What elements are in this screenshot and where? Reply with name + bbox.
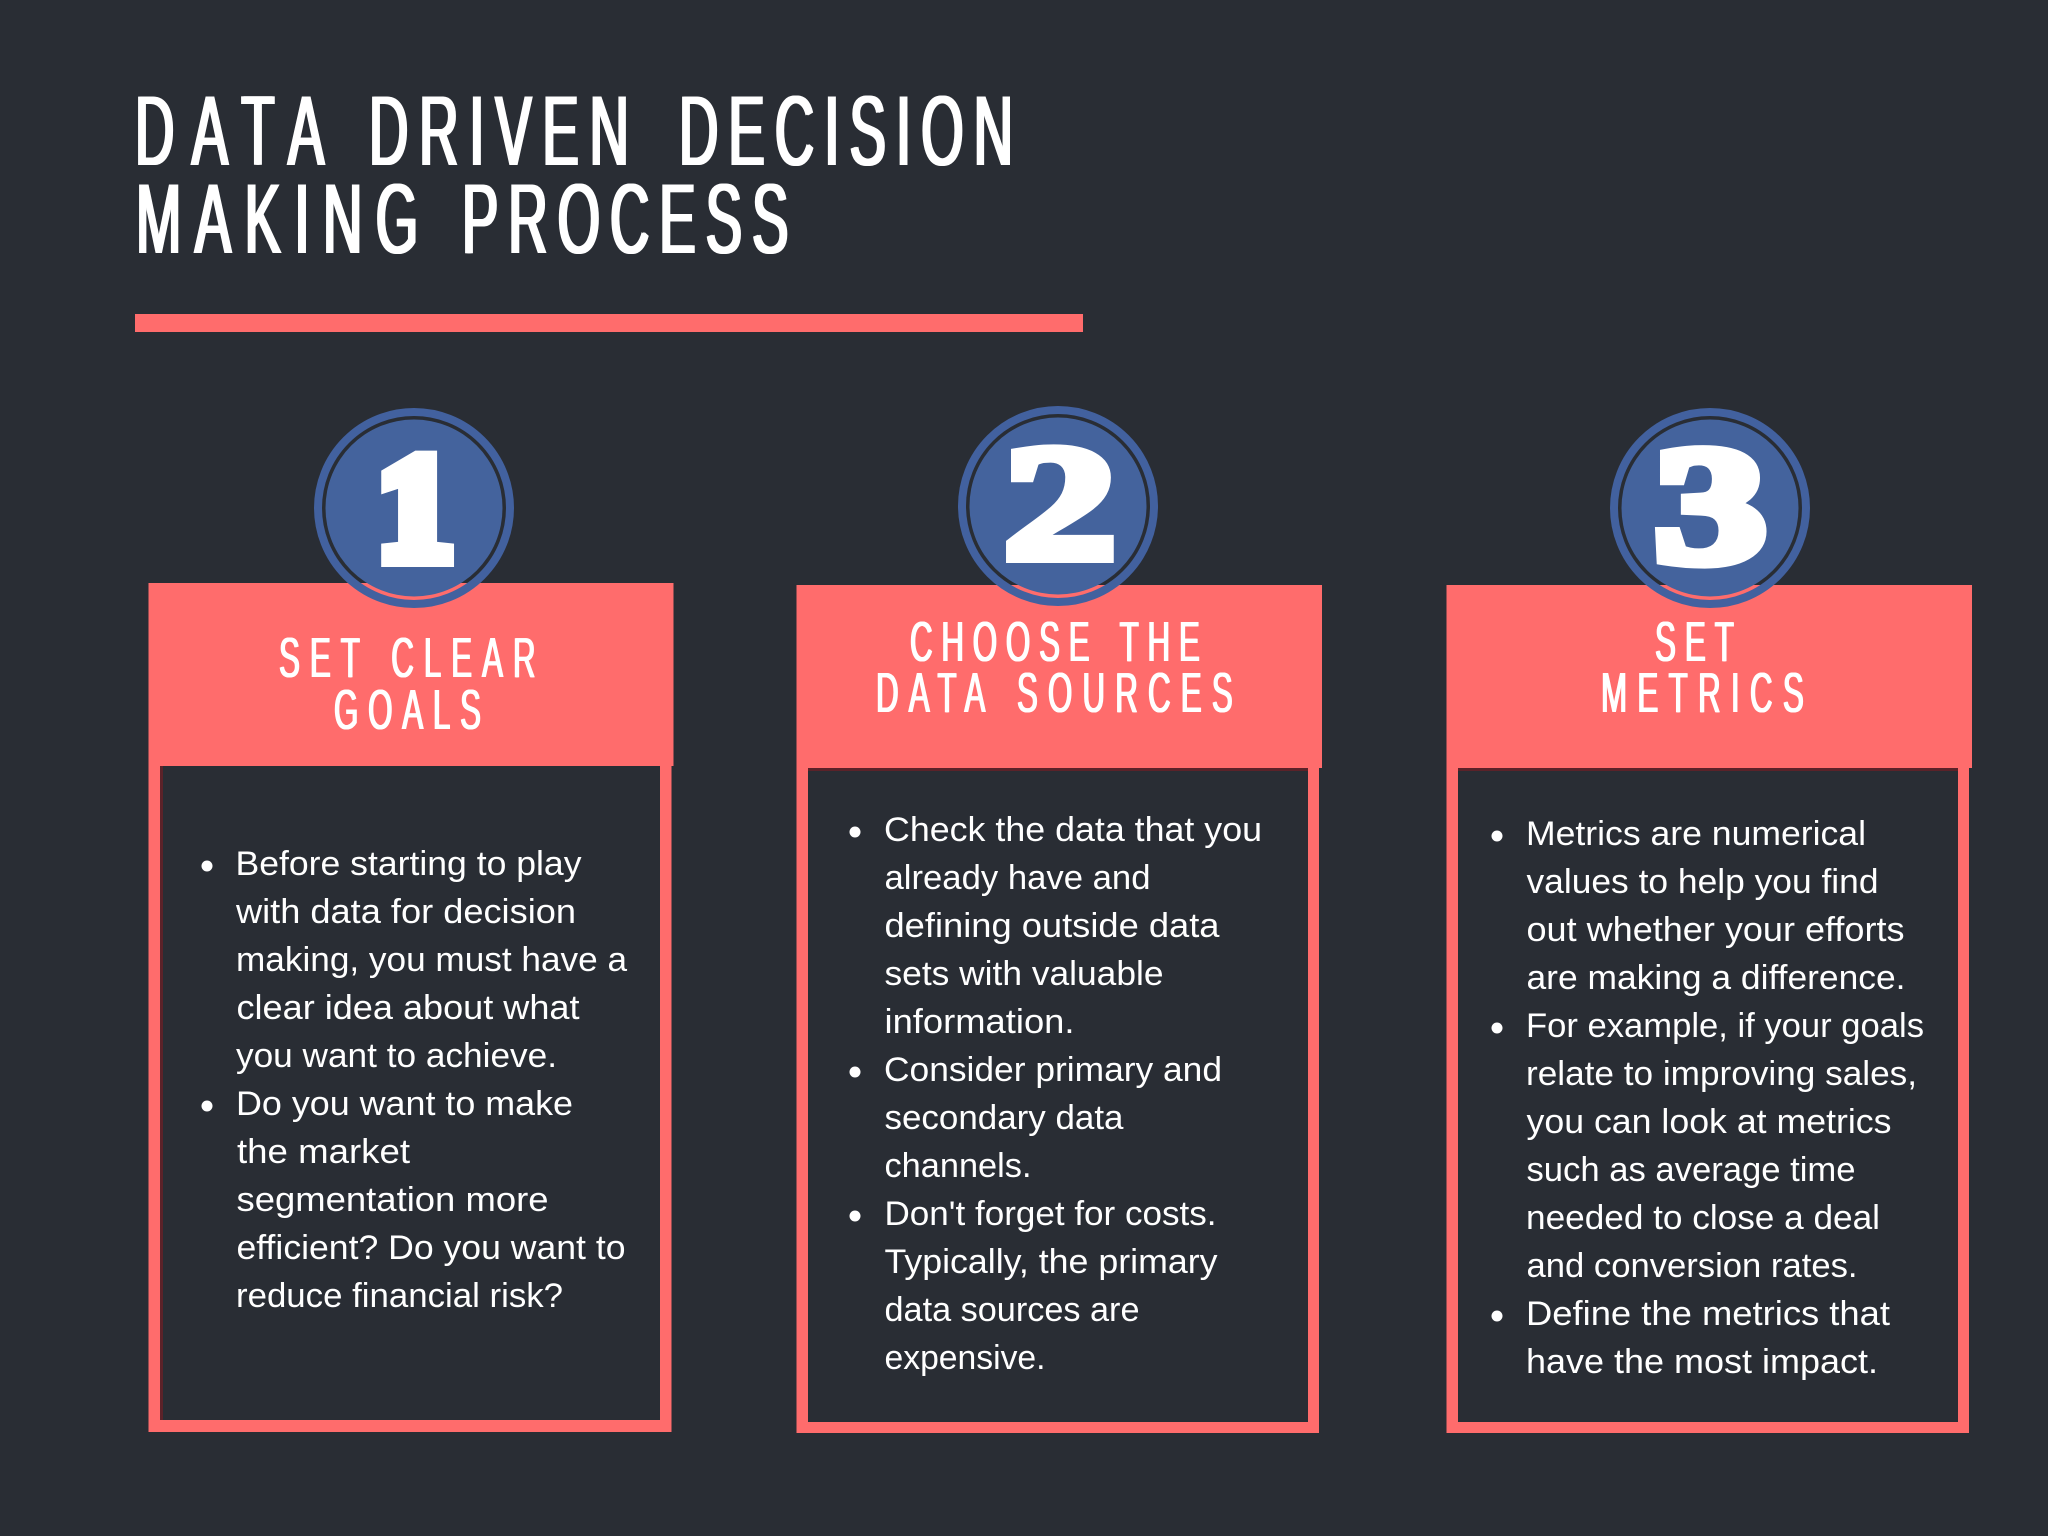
step 3 heading: METRICS: [1601, 661, 1814, 725]
step 1 bullet list: segmentation more: [236, 1181, 548, 1219]
step 1 bullet list: you want to achieve.: [236, 1037, 557, 1075]
step 1 bullet list: with data for decision: [235, 893, 576, 931]
step 3 bullet list: and conversion rates.: [1526, 1247, 1858, 1285]
step 2 bullet list: Consider primary and: [884, 1051, 1222, 1089]
step 1 bullet list: the market: [237, 1133, 411, 1171]
title: DRIVEN: [369, 75, 640, 186]
step 3 bullet list: such as average time: [1526, 1151, 1856, 1189]
title: [135, 75, 1023, 274]
step 1 bullet list: efficient? Do you want to: [236, 1229, 626, 1267]
title: MAKING: [136, 163, 432, 274]
icon: number 3 badge: [1614, 412, 1806, 604]
panel: step 2 choose the data sources: [796, 406, 1322, 1433]
step 3 heading: [1601, 610, 1814, 725]
step 2 body frame: [796, 762, 1319, 1433]
step 2 bullet list: [850, 811, 1262, 1377]
panel: step 1 set clear goals: [148, 408, 674, 1432]
panel: step 3 set metrics: [1446, 408, 1972, 1433]
step 2 bullet list: Typically, the primary: [884, 1243, 1218, 1281]
icon: number 1 badge: 1: [378, 426, 453, 591]
step 3 bullet list: For example, if your goals: [1526, 1007, 1924, 1045]
step 2 bullet list: data sources are: [884, 1291, 1140, 1329]
step 1 header band: [148, 583, 674, 766]
step 3 heading: SET: [1654, 610, 1742, 674]
step 2 bullet list: Don't forget for costs.: [884, 1195, 1216, 1233]
step 2 heading: CHOOSE THE: [910, 610, 1209, 674]
step 2 bullet list: defining outside data: [884, 907, 1220, 945]
step 1 bullet list: Do you want to make: [236, 1085, 573, 1123]
step 3 bullet list: relate to improving sales,: [1526, 1055, 1917, 1093]
step 1 heading: GOALS: [334, 678, 491, 742]
step 3 bullet list: are making a difference.: [1526, 959, 1906, 997]
step 1 heading: [279, 626, 546, 742]
title: DECISION: [679, 75, 1023, 186]
step 1 bullet list: making, you must have a: [236, 941, 627, 979]
step 2 bullet list: sets with valuable: [884, 955, 1164, 993]
icon: number 1 badge: [318, 412, 510, 604]
step 1 bullet list: [202, 845, 627, 1315]
step 3 bullet list: Metrics are numerical: [1526, 815, 1866, 853]
step 2 bullet list: Check the data that you: [884, 811, 1262, 849]
step 1 bullet list: clear idea about what: [236, 989, 580, 1027]
step 1 bullet list: reduce financial risk?: [236, 1277, 563, 1315]
step 3 bullet list: you can look at metrics: [1526, 1103, 1892, 1141]
step 3 bullet list: out whether your efforts: [1526, 911, 1904, 949]
step 1 body frame: [148, 760, 672, 1432]
step 2 heading: [876, 610, 1243, 725]
step 1 bullet list: Before starting to play: [236, 845, 582, 883]
title: DATA: [135, 75, 342, 186]
icon: number 2 badge: [962, 410, 1154, 602]
step 3 header band: [1446, 585, 1972, 768]
step 2 bullet list: information.: [884, 1003, 1074, 1041]
step 3 bullet list: [1492, 815, 1924, 1381]
step 2 bullet list: secondary data: [884, 1099, 1124, 1137]
step 2 bullet list: expensive.: [884, 1339, 1046, 1377]
step 3 bullet list: values to help you find: [1526, 863, 1878, 901]
title underline bar: [134, 314, 1083, 332]
step 3 bullet list: have the most impact.: [1526, 1343, 1878, 1381]
step 1 heading: SET CLEAR: [279, 626, 546, 690]
step 3 bullet list: needed to close a deal: [1526, 1199, 1880, 1237]
step 2 bullet list: already have and: [884, 859, 1150, 897]
icon: number 2 badge: 2: [1003, 412, 1117, 594]
step 2 heading: DATA SOURCES: [876, 661, 1243, 725]
step 3 bullet list: Define the metrics that: [1526, 1295, 1891, 1333]
step 2 header band: [796, 585, 1322, 768]
step 3 body frame: [1446, 762, 1969, 1433]
step 2 bullet list: channels.: [884, 1147, 1032, 1185]
icon: number 3 badge: 3: [1655, 414, 1766, 597]
title: PROCESS: [462, 163, 798, 274]
